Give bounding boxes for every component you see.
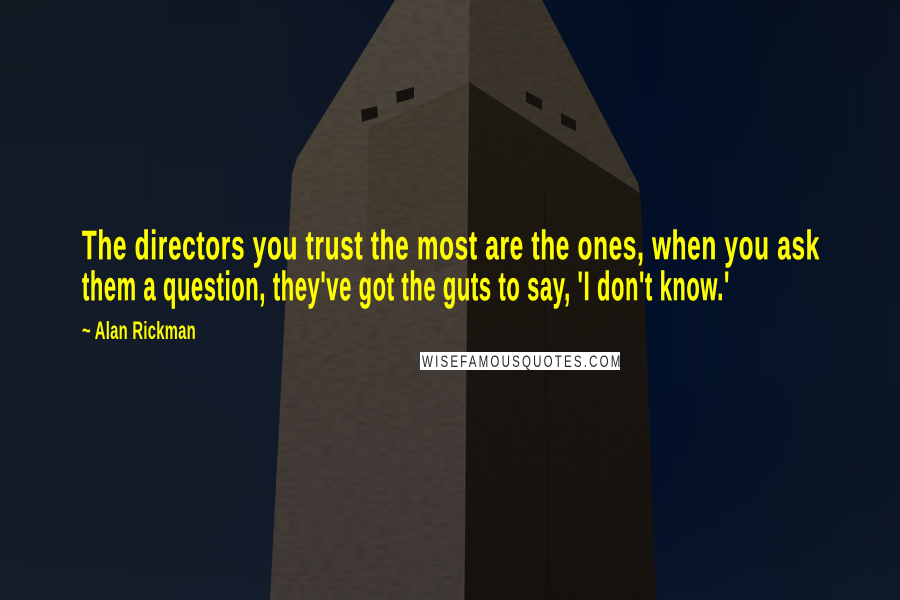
watermark badge: WISEFAMOUSQUOTES.COM bbox=[422, 353, 623, 372]
corner edge bbox=[464, 0, 469, 600]
right face of obelisk bbox=[464, 0, 656, 600]
stone texture bbox=[350, 2, 460, 310]
obelisk monument bbox=[270, 0, 656, 600]
window slots bbox=[361, 87, 576, 131]
stained patch on left face bbox=[365, 82, 469, 300]
sunlit band on right face bbox=[469, 0, 640, 193]
vertical seam on right face bbox=[544, 190, 549, 600]
attribution: ~ Alan Rickman bbox=[82, 317, 196, 345]
quote text bbox=[82, 222, 820, 309]
left face of obelisk bbox=[270, 0, 469, 600]
